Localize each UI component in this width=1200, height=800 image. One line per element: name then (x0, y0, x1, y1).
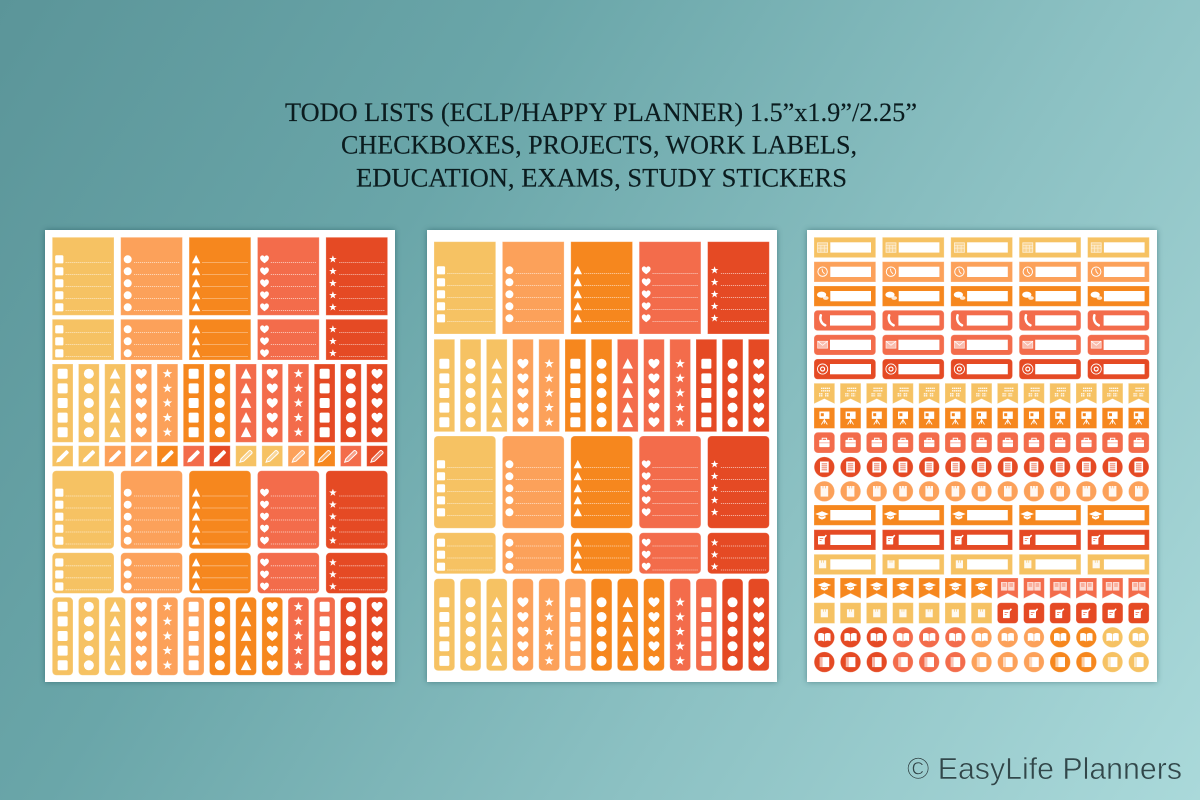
open book circle stickers (814, 627, 1149, 648)
email at-sign labels (814, 359, 1149, 379)
rounded icon strips (52, 597, 387, 675)
square icon strips (434, 339, 769, 432)
copyright text: © EasyLife Planners (907, 751, 1182, 786)
rounded icon strips (434, 579, 769, 671)
square checklist cards, tall (52, 237, 388, 315)
title: EDUCATION, EXAMS, STUDY STICKERS (356, 164, 847, 192)
notebook circle stickers (814, 652, 1149, 672)
yellow flag stickers (814, 383, 1149, 404)
graduation cap labels (814, 505, 1149, 525)
pencil stickers (52, 446, 387, 466)
title: CHECKBOXES, PROJECTS, WORK LABELS, (341, 130, 857, 160)
square checklist cards, short (52, 319, 388, 360)
clock labels (814, 262, 1149, 282)
briefcase stickers (814, 432, 1149, 453)
rounded checklist cards, tall (434, 436, 769, 528)
panel: work and study sticker sheet (807, 230, 1157, 682)
title: TODO LISTS (ECLP/HAPPY PLANNER) 1.5”x1.9”/2.25” (285, 98, 917, 127)
note and exam square stickers (814, 603, 1149, 623)
list circle stickers (814, 457, 1149, 477)
square icon strips (52, 364, 387, 442)
rounded checklist cards, short (52, 553, 388, 593)
phone labels (814, 310, 1149, 331)
notebook labels (814, 554, 1149, 575)
rounded checklist cards, short (434, 533, 769, 574)
calendar labels (814, 237, 1149, 258)
exam pencil labels (814, 530, 1149, 550)
rounded checklist cards, tall (52, 471, 388, 549)
envelope labels (814, 335, 1149, 355)
panel: checklist sheet two (427, 230, 777, 682)
presentation stickers (814, 408, 1149, 428)
note circle stickers (814, 481, 1149, 502)
chat labels (814, 286, 1149, 306)
title (285, 98, 917, 192)
square checklist cards (434, 242, 769, 334)
cap and book flag stickers (814, 578, 1149, 598)
panel: checklist sheet one (45, 230, 395, 682)
